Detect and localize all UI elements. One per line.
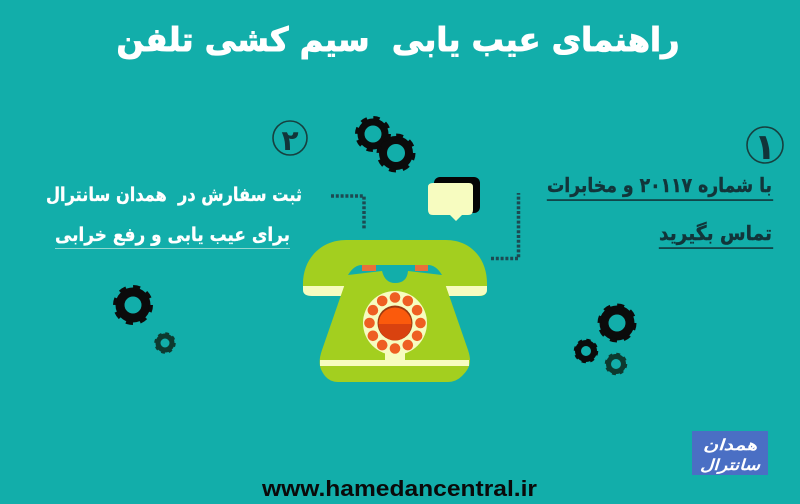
step 2 text (46, 184, 302, 249)
gear: left large (115, 287, 151, 323)
step 2 badge: ۲ (281, 124, 299, 157)
dotted connector: left (331, 196, 364, 230)
logo badge (692, 431, 768, 475)
base stripe (320, 360, 469, 366)
logo badge: همدان (703, 436, 757, 454)
telephone illustration (303, 240, 487, 382)
cradle orange clips (362, 265, 428, 271)
gears: right group (575, 306, 634, 374)
title: راهنمای عیب یابی سیم کشی تلفن (116, 20, 680, 60)
dotted connector: right (491, 193, 518, 258)
rotary dial (363, 291, 427, 361)
step 1 text: با شماره ۲۰۱۱۷ و مخابرات (547, 173, 772, 197)
gear: left small (156, 334, 174, 352)
step 1 text (547, 173, 773, 249)
handset (303, 240, 487, 296)
icon: speech bubbles (428, 177, 480, 221)
gears: top pair (357, 118, 414, 170)
website url: www.hamedancentral.ir (261, 476, 537, 501)
step 2 text: برای عیب یابی و رفع خرابی (55, 224, 290, 246)
cradle (348, 265, 442, 283)
logo badge: سانترال (700, 456, 762, 474)
step 1 text: تماس بگیرید (659, 221, 772, 245)
step 2 text: ثبت سفارش در همدان سانترال (46, 184, 302, 206)
handset cream edges (303, 286, 487, 296)
step 2 badge (273, 121, 307, 157)
step 1 badge: ۱ (754, 127, 776, 168)
step 1 badge (747, 127, 783, 168)
phone body (320, 265, 470, 382)
